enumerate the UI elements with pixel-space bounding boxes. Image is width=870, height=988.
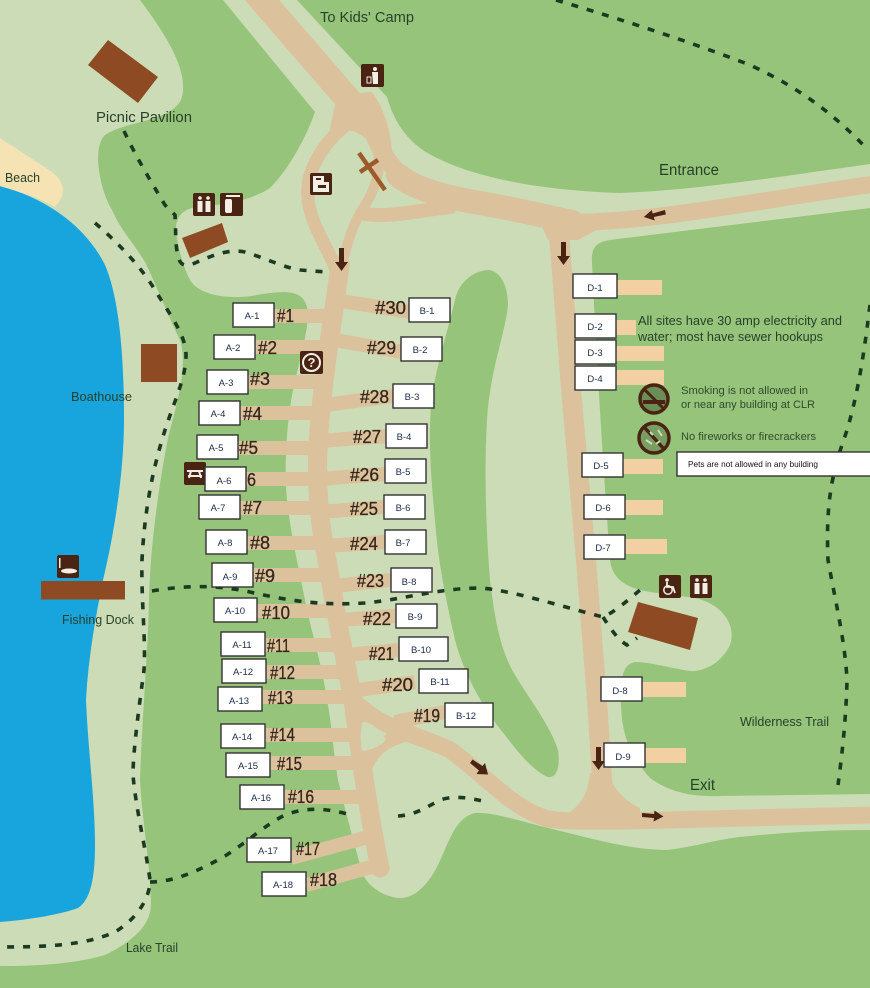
site numbers: #11 [267,636,290,656]
site numbers: #17 [296,839,320,859]
arrow: southeast on exit road [470,760,488,774]
site numbers: #19 [414,706,440,726]
icon: dump station [310,173,332,195]
small road island [361,722,386,751]
site labels B row: B-6 [396,503,410,514]
site labels A row: A-6 [217,476,231,487]
central green lobe [430,270,559,777]
site numbers: #27 [353,427,381,447]
site labels B row: B-9 [408,612,422,623]
note: smoking [681,385,815,411]
site labels B row: B-2 [413,345,427,356]
site labels D row: D-7 [595,543,611,554]
note: pets box [677,452,870,476]
icon: information: ? [308,355,316,370]
label: exit: Exit [690,777,716,794]
site labels A row: A-15 [238,761,258,772]
lake [0,186,124,922]
label: entrance: Entrance [659,162,719,179]
note: electricity and water: water; most have sewer hookups [637,329,823,344]
title label: to kids camp: To Kids' Camp [320,9,414,26]
site labels B row: B-12 [456,711,476,722]
note: smoking: Smoking is not allowed in [681,385,808,397]
D row parking pads [616,280,686,763]
site numbers: #15 [277,754,302,774]
site labels B row: B-4 [397,432,411,443]
site labels B row: B-10 [411,645,431,656]
arrow: east to exit [642,810,664,822]
site numbers: #1 [277,306,294,326]
site labels A row: A-5 [209,443,223,454]
label: boathouse: Boathouse [71,390,132,404]
building: east restroom [628,602,698,650]
building: restroom [182,223,228,258]
site labels D row: D-9 [615,752,631,763]
site labels A row: A-7 [211,503,225,514]
site numbers: #3 [250,369,270,389]
icon: restrooms [193,193,215,216]
site numbers: #10 [262,603,290,623]
site labels A row: A-4 [211,409,225,420]
site labels A row: A-3 [219,378,233,389]
site labels B row: B-11 [430,677,450,688]
site labels B row: B-5 [396,467,410,478]
site labels A row: A-8 [218,538,232,549]
icon: no smoking [640,385,668,413]
site numbers: #20 [382,675,413,695]
site numbers: #26 [350,465,379,485]
site labels A row: A-18 [273,880,293,891]
site numbers: #4 [243,404,262,424]
icon: wheelchair access [659,575,681,598]
arrow: west at entrance [644,210,666,220]
bridge cross [359,153,385,190]
label: fishing dock: Fishing Dock [62,612,134,627]
icon: fishing [57,555,79,578]
site labels A row [197,303,306,896]
label: wilderness trail: Wilderness Trail [740,714,829,729]
site labels B row: B-8 [402,577,416,588]
label: picnic pavilion: Picnic Pavilion [96,110,192,126]
note: fireworks: No fireworks or firecrackers [681,431,817,443]
site labels A row: A-13 [229,696,249,707]
site labels A row: A-1 [245,311,259,322]
site numbers [239,298,440,890]
note: smoking: or near any building at CLR [681,399,815,411]
label: beach: Beach [5,171,40,185]
site labels D row: D-8 [612,686,628,697]
site numbers: #22 [363,609,391,629]
note: electricity and water [637,313,842,344]
site labels B row: B-3 [405,392,419,403]
fishing dock [41,581,125,600]
light ground: road shoulders and central area [176,0,870,898]
icon: picnic table [184,462,206,485]
site labels A row: A-10 [225,606,245,617]
arrow: south near exit [592,747,605,770]
site labels A row: A-11 [232,640,252,651]
site labels A row: A-16 [251,793,271,804]
site numbers: #24 [350,534,378,554]
icon: no fireworks [639,423,669,453]
site labels D row [573,274,645,767]
light ground: west shore [0,0,183,966]
building: picnic pavilion [88,40,158,103]
site numbers: #14 [270,725,295,745]
site numbers: #9 [255,566,275,586]
icon: information [300,351,323,374]
icon: trash [361,64,384,87]
site numbers: #23 [357,571,384,591]
note: pets box: Pets are not allowed in any building [688,459,818,469]
site labels B row: B-1 [420,306,434,317]
site numbers: #21 [369,644,394,664]
site numbers: #5 [239,438,258,458]
site numbers: #13 [268,688,293,708]
campsite spurs [238,300,445,885]
site labels A row: A-12 [233,667,253,678]
arrow: south on main road [335,248,348,271]
site labels A row: A-2 [226,343,240,354]
icon: fire extinguisher [220,193,243,216]
site numbers: #28 [360,387,389,407]
note: electricity and water: All sites have 30 amp electricity and [638,313,842,328]
site numbers: #18 [310,870,337,890]
site labels B row [384,298,493,727]
roads [255,0,870,868]
site numbers: #8 [250,533,270,553]
label: lake trail: Lake Trail [126,941,178,955]
site numbers: #25 [350,499,378,519]
site labels D row: D-4 [587,374,603,385]
site labels D row: D-6 [595,503,611,514]
site labels D row: D-5 [593,461,609,472]
beach [0,138,63,207]
site labels D row: D-3 [587,348,603,359]
site numbers: #30 [375,298,406,318]
arrow: south on east road [557,242,570,265]
site labels A row: A-14 [232,732,252,743]
site numbers: #2 [258,338,277,358]
site numbers: #29 [367,338,396,358]
site numbers: 6 [247,470,256,490]
site numbers: #16 [288,787,314,807]
site labels B row: B-7 [396,538,410,549]
site numbers: #7 [243,498,262,518]
site labels A row: A-17 [258,846,278,857]
site labels A row: A-9 [223,572,237,583]
icon: east restrooms [690,575,712,598]
site labels D row: D-1 [587,283,603,294]
building: boathouse [141,344,177,382]
site labels D row: D-2 [587,322,603,333]
site numbers: #12 [270,663,295,683]
